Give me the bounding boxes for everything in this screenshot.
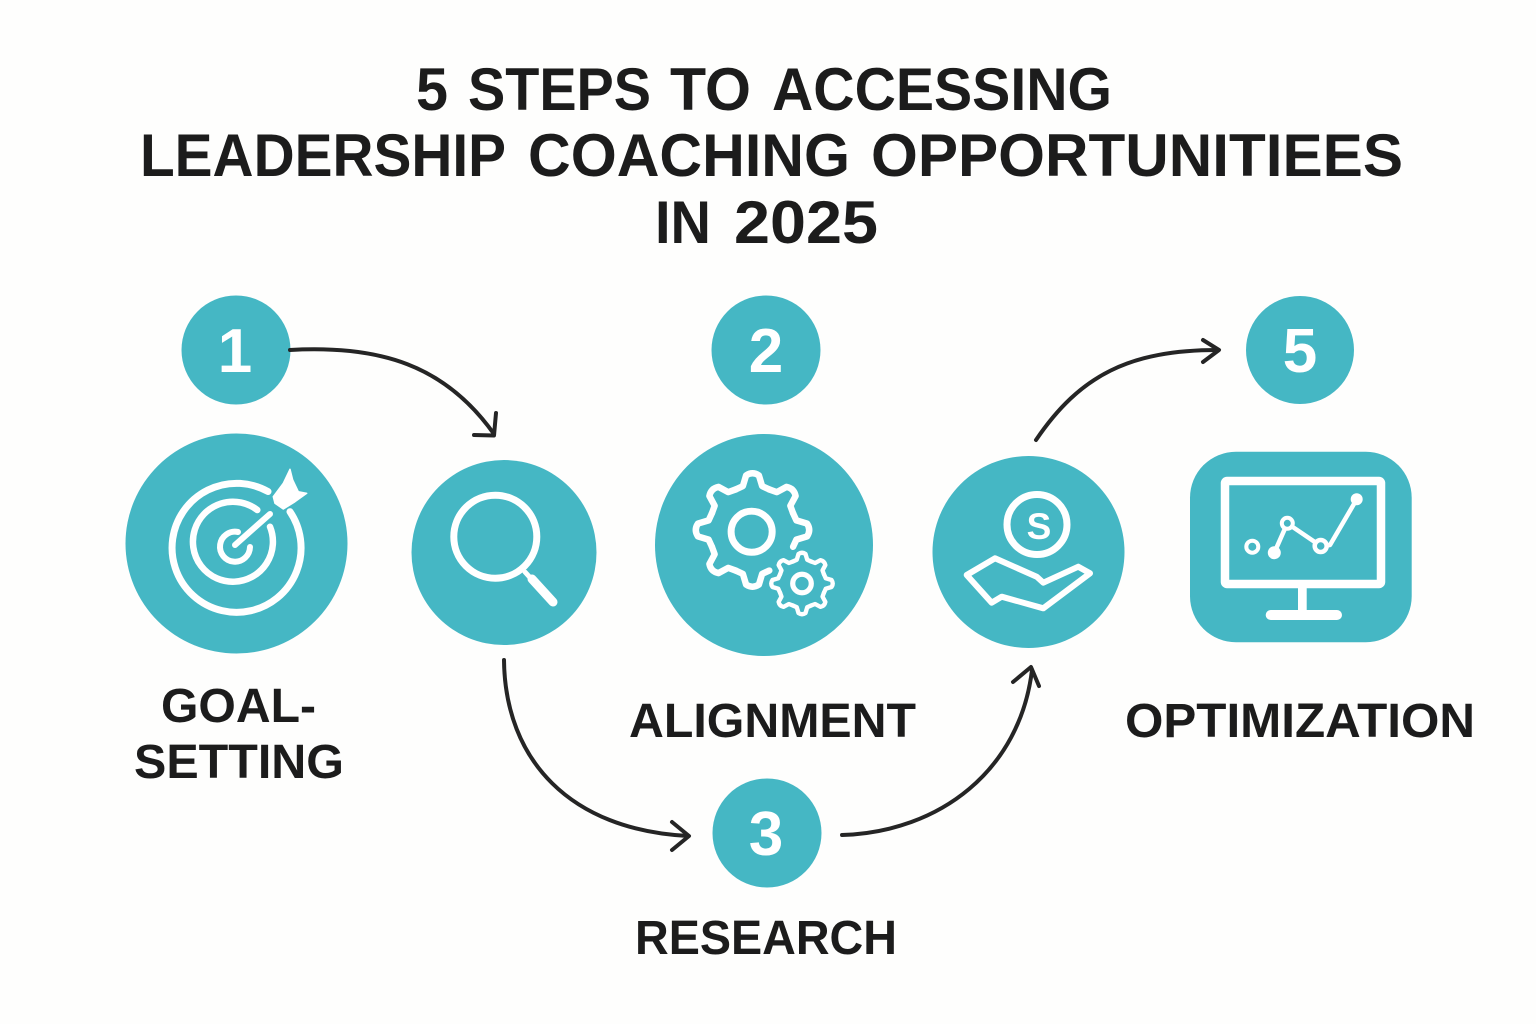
icon: magnifying glass <box>412 460 596 645</box>
label: goal-setting: SETTING <box>134 736 344 789</box>
icon: monitor with line chart <box>1190 452 1412 642</box>
small gear <box>771 553 833 614</box>
label: research: RESEARCH <box>635 912 897 965</box>
large gear <box>696 473 809 587</box>
label: alignment: ALIGNMENT <box>629 695 916 748</box>
step 1 number badge: 1 <box>218 317 252 386</box>
title: OPPORTUNITIEES <box>871 122 1403 189</box>
icon: gears <box>655 434 873 656</box>
label: goal-setting: GOAL- <box>161 680 316 733</box>
step 3 number badge: 3 <box>749 800 783 869</box>
step 1 number badge <box>182 296 290 404</box>
icon: target with arrow <box>126 434 348 654</box>
step 3 number badge <box>712 778 822 888</box>
step 2 number badge: 2 <box>749 317 783 386</box>
arrow: step 3 to coin hand <box>842 667 1039 835</box>
title: TO <box>670 56 751 123</box>
step 5 number badge <box>1246 296 1354 404</box>
title: 2025 <box>734 189 878 256</box>
step 2 number badge <box>712 296 820 404</box>
arrow: coin hand to step 5 <box>1036 340 1219 440</box>
title: LEADERSHIP <box>140 122 506 189</box>
icon: hand holding coin <box>932 456 1124 648</box>
step 5 number badge: 5 <box>1283 317 1317 386</box>
title: IN <box>655 189 711 256</box>
title: 5 <box>416 56 448 123</box>
title: COACHING <box>528 122 850 189</box>
title: ACCESSING <box>772 56 1112 123</box>
arrow: step 1 to search <box>290 349 496 436</box>
title: STEPS <box>468 56 651 123</box>
title <box>140 56 1403 256</box>
icon: hand holding coin: S <box>1027 506 1051 547</box>
label: goal-setting <box>134 680 344 789</box>
label: optimization: OPTIMIZATION <box>1125 695 1475 748</box>
arrow: search to step 3 <box>504 660 689 850</box>
